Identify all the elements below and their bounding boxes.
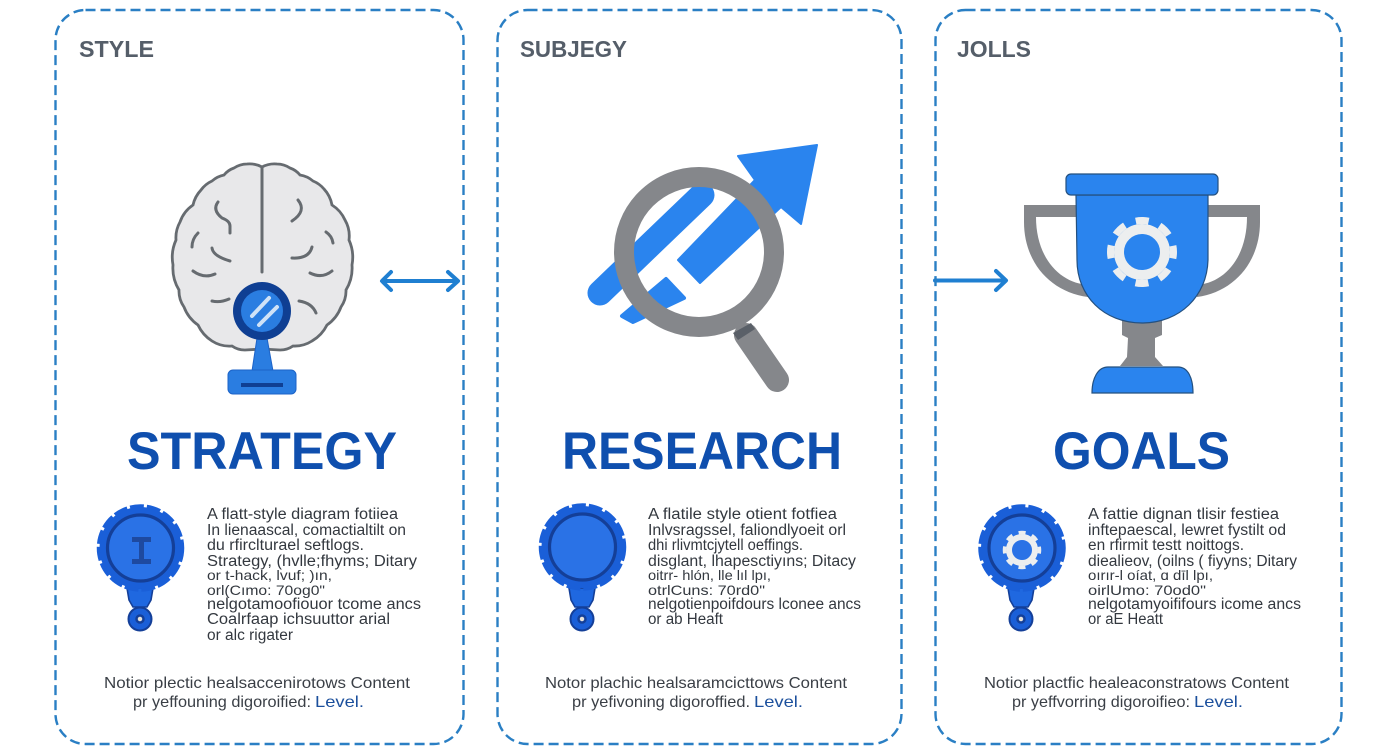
- badge: plain disc: [540, 505, 624, 630]
- footer note: research: Notor plachic healsaramcicttows Content: [545, 675, 848, 692]
- text block: strategy description: Coalrfaap ichsuuttor arial: [207, 611, 390, 628]
- text block: strategy description: In lienaascal, comactialtilt on: [207, 522, 406, 539]
- text block: goals description: oirlUmo: 70od0": [1088, 582, 1206, 598]
- label: subject: SUBJEGY: [520, 36, 627, 62]
- heading: strategy: STRATEGY: [127, 422, 397, 481]
- panel: goals: [936, 10, 1342, 744]
- badge: gear: [980, 506, 1064, 630]
- text block: goals description: oırır-l oíat, ɑ dīl lpı,: [1088, 567, 1213, 583]
- arrow: two-way connector: [382, 272, 458, 290]
- text block: strategy description: du rfirclturael seftlogs.: [207, 537, 364, 554]
- heading: goals: GOALS: [1053, 422, 1230, 481]
- text block: strategy description: Strategy, (hvlle;fhyms; Ditary: [207, 553, 417, 570]
- text block: strategy description: [207, 506, 421, 644]
- text block: goals description: inftepaescal, lewret fystilt od: [1088, 522, 1286, 539]
- text block: strategy description: nelgotamoofiouor tcome ancs: [207, 596, 421, 613]
- text block: research description: otrlCuns: 70rd0": [648, 582, 765, 598]
- heading: research: RESEARCH: [562, 422, 842, 481]
- text block: strategy description: orl(Cımo: 70og0": [207, 582, 325, 598]
- text block: strategy description: or t-hack, lvuf; )ın,: [207, 567, 332, 583]
- text block: research description: dhi rlivmtcjytell oeffings.: [648, 537, 803, 554]
- text block: research description: oitrr- hlón, lle lıl lpı,: [648, 567, 771, 583]
- text block: strategy description: or alc rigater: [207, 627, 293, 644]
- text block: goals description: en rfirmit testt noittogs.: [1088, 537, 1244, 554]
- panel border: research: [498, 10, 902, 744]
- panel: strategy: [56, 10, 464, 744]
- text block: research description: Inlvsragssel, faliondlyoeit orl: [648, 522, 846, 539]
- footer note: goals: Level.: [1194, 694, 1243, 711]
- text block: research description: or ab Heaft: [648, 611, 724, 628]
- arrow: one-way connector: [935, 271, 1006, 290]
- text block: research description: nelgotienpoifdours lconee ancs: [648, 596, 861, 613]
- panel border: goals: [936, 10, 1342, 744]
- text block: strategy description: A flatt-style diagram fotiiea: [207, 506, 398, 523]
- text block: research description: disglant, lhapesctiyıns; Ditacy: [648, 553, 856, 570]
- text block: goals description: nelgotamyoififours icome ancs: [1088, 596, 1301, 613]
- footer note: research: [545, 675, 848, 711]
- footer note: strategy: Notior plectic healsaccenirotows Content: [104, 675, 411, 692]
- footer note: goals: [984, 675, 1290, 711]
- panel border: strategy: [56, 10, 464, 744]
- text block: goals description: [1088, 506, 1301, 628]
- text block: goals description: or aE Heatt: [1088, 611, 1164, 628]
- footer note: goals: pr yeffvorring digoroifieo:: [1012, 694, 1190, 711]
- label: style: STYLE: [79, 36, 154, 62]
- panel: research: [498, 10, 902, 744]
- icon: trophy with gear: [1024, 174, 1260, 393]
- icon: magnifier over arrow: [600, 145, 817, 380]
- footer note: strategy: [104, 675, 411, 711]
- footer note: research: pr yefivoning digoroffied.: [572, 694, 750, 711]
- label: jolls: JOLLS: [957, 36, 1031, 62]
- footer note: strategy: Level.: [315, 694, 364, 711]
- badge: letter I: [98, 506, 182, 630]
- footer note: goals: Notior plactfic healeaconstratows Content: [984, 675, 1290, 692]
- text block: research description: [648, 506, 861, 628]
- text block: goals description: A fattie dignan tlisir festiea: [1088, 506, 1279, 523]
- text block: research description: A flatile style otient fotfiea: [648, 506, 837, 523]
- footer note: research: Level.: [754, 694, 803, 711]
- icon: brain with lens: [172, 164, 353, 394]
- footer note: strategy: pr yeffouning digoroified:: [133, 694, 311, 711]
- text block: goals description: diealieov, (oilns ( fiyyns; Ditary: [1088, 553, 1297, 570]
